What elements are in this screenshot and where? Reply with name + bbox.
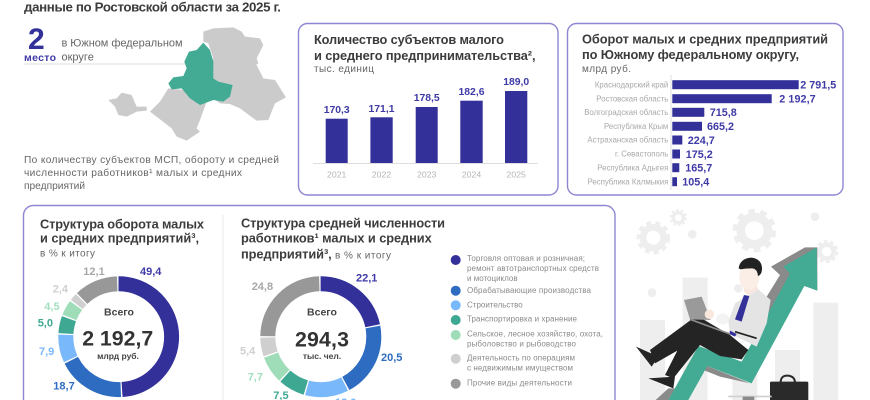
donut chart: turnover: 5,0 <box>38 318 53 330</box>
heading: turnover structure <box>40 216 205 260</box>
map caption: численности работников¹ малых и средних <box>24 167 242 179</box>
heading <box>314 32 536 75</box>
heading: по Южному федеральному округу, <box>582 47 799 62</box>
rank number: 2 <box>28 23 45 56</box>
rank description <box>62 38 182 64</box>
donut chart: turnover: млрд руб. <box>97 351 139 361</box>
heading: turnover structure: и средних предприятий³, <box>40 231 199 246</box>
legend <box>451 254 603 389</box>
legend: Сельское, лесное хозяйство, охота, <box>467 329 603 338</box>
donut chart: turnover: 7,9 <box>39 346 54 358</box>
legend: и мотоциклов <box>467 274 518 283</box>
donut chart: turnover: Всего <box>104 307 134 319</box>
donut chart: employment: 7,7 <box>248 371 263 383</box>
rank description: округе <box>62 52 94 64</box>
rank description: в Южном федеральном <box>62 38 182 50</box>
map caption: предприятий <box>24 181 85 192</box>
briefcase and documents <box>728 376 808 400</box>
bar chart: 182,6 <box>458 87 485 98</box>
businessman <box>636 258 771 388</box>
donut chart: turnover: 4,5 <box>44 301 60 313</box>
donut chart: employment: 22,1 <box>356 273 377 285</box>
horizontal bar chart: Астраханская область <box>587 136 668 145</box>
legend: Обрабатывающие производства <box>467 286 592 295</box>
bar chart: 178,5 <box>414 93 440 104</box>
donut chart: turnover <box>38 266 172 392</box>
heading: млрд руб. <box>582 63 631 75</box>
donut chart: employment: 294,3 <box>295 328 349 352</box>
heading: и среднего предпринимательства², <box>314 48 536 63</box>
horizontal bar chart: 715,8 <box>710 107 737 119</box>
donut chart: employment <box>240 273 402 400</box>
panel: rank and map <box>24 23 286 192</box>
bar chart: 2023 <box>417 170 437 180</box>
bar chart <box>313 77 538 180</box>
donut chart: employment: тыс. чел. <box>303 351 341 361</box>
illustration: businessman on a rising arrow <box>636 210 838 400</box>
arrow <box>656 247 817 400</box>
bar chart: 2021 <box>327 170 347 180</box>
horizontal bar chart: 105,4 <box>682 176 709 188</box>
heading: employment structure <box>241 216 445 261</box>
map: southern federal district <box>108 27 286 141</box>
legend: Строительство <box>467 300 523 309</box>
horizontal bar chart: 224,7 <box>688 135 715 147</box>
panel: turnover by region <box>568 24 843 195</box>
bar chart: 2024 <box>462 170 481 180</box>
horizontal bar chart: 165,7 <box>685 162 712 174</box>
horizontal bar chart: 665,2 <box>707 121 734 133</box>
bar chart: 2022 <box>372 170 391 180</box>
heading: employment structure: предприятий³, <box>241 246 332 261</box>
heading: тыс. единиц <box>314 64 374 75</box>
legend: Деятельность по операциям <box>467 354 575 363</box>
bar chart: 170,3 <box>324 105 350 116</box>
bar chart: 2025 <box>507 170 526 180</box>
legend: Торговля оптовая и розничная; <box>467 254 585 263</box>
donut chart: turnover: 18,7 <box>53 380 75 392</box>
horizontal bar chart: Волгоградская область <box>584 108 668 117</box>
background gears and bars <box>638 210 838 400</box>
legend: рыболовство и рыбоводство <box>467 339 577 348</box>
rank caption: место <box>24 52 56 64</box>
horizontal bar chart: 2 791,5 <box>800 80 836 92</box>
donut chart: turnover: 2 192,7 <box>82 327 153 351</box>
panel: number of SMEs <box>298 24 558 195</box>
horizontal bar chart: 2 192,7 <box>779 94 816 106</box>
panel: structure <box>24 206 615 400</box>
map caption: По количеству субъектов МСП, обороту и средней <box>24 154 279 166</box>
legend: ремонт автотранспортных средств <box>467 264 599 273</box>
horizontal bar chart: Республика Калмыкия <box>588 177 668 186</box>
horizontal bar chart: Республика Крым <box>604 122 668 131</box>
horizontal bar chart: г. Севастополь <box>615 150 668 159</box>
donut chart: turnover: 2,4 <box>53 284 69 296</box>
heading: employment structure: Структура средней численности <box>241 216 445 231</box>
donut chart: employment: 5,4 <box>240 345 256 357</box>
bar chart: 189,0 <box>503 77 529 88</box>
legend: с недвижимым имуществом <box>467 363 573 372</box>
horizontal bar chart <box>584 75 836 190</box>
heading <box>582 32 828 75</box>
horizontal bar chart: 175,2 <box>686 149 713 161</box>
donut chart: turnover: 49,4 <box>140 266 162 278</box>
heading: employment structure: работников¹ малых и средних <box>241 231 433 246</box>
legend: Транспортировка и хранение <box>467 315 578 324</box>
heading: employment structure: в % к итогу <box>335 250 391 261</box>
heading: turnover structure: Структура оборота малых <box>40 216 205 231</box>
bar chart: 171,1 <box>368 104 395 115</box>
donut chart: employment: 24,8 <box>252 281 273 293</box>
heading: turnover structure: в % к итогу <box>40 249 95 260</box>
horizontal bar chart: Республика Адыгея <box>597 163 668 172</box>
heading: Оборот малых и средних предприятий <box>582 32 828 47</box>
heading: Количество субъектов малого <box>314 32 504 47</box>
donut chart: employment: Всего <box>307 307 337 319</box>
legend: Прочие виды деятельности <box>467 379 572 388</box>
horizontal bar chart: Ростовская область <box>596 94 668 103</box>
horizontal bar chart: Краснодарский край <box>595 80 668 89</box>
map caption <box>24 154 279 192</box>
donut chart: turnover: 12,1 <box>83 266 105 278</box>
donut chart: employment: 20,5 <box>381 352 402 364</box>
